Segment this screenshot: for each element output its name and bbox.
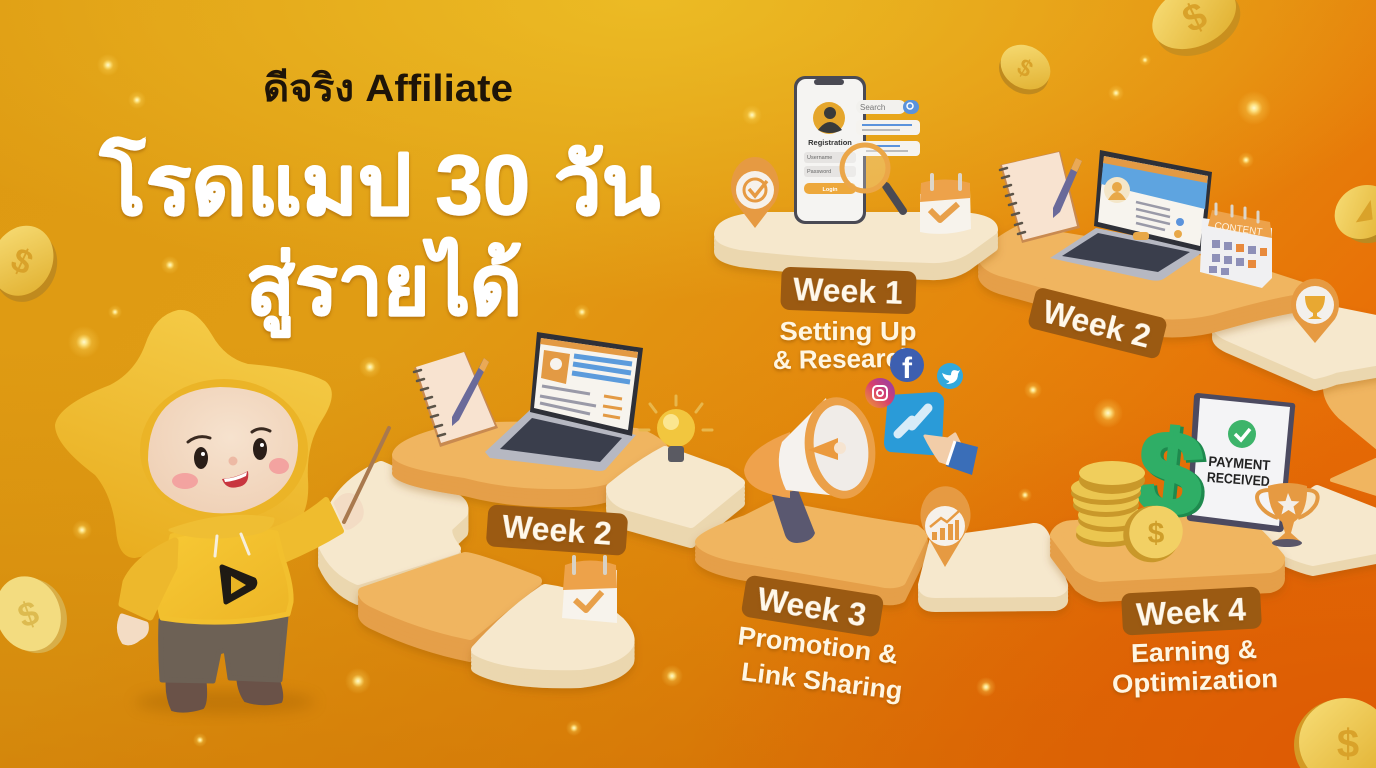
password field — [804, 166, 856, 177]
icon: search panel — [856, 100, 920, 156]
icon: facebook — [890, 348, 924, 385]
star hood — [55, 310, 332, 558]
platform: cream far right lower — [1252, 490, 1376, 571]
icon: green dollar: $ — [1133, 407, 1212, 545]
icon: tablet payment received: RECEIVED — [1206, 469, 1270, 489]
label: week 2 top — [1027, 286, 1168, 360]
face — [148, 387, 298, 513]
platform: orange left top — [397, 427, 663, 502]
platform: orange right edge high — [1325, 367, 1376, 450]
username field: Username — [807, 155, 832, 161]
sleeve left — [122, 541, 175, 617]
login button — [804, 183, 856, 194]
text: setting up and research — [773, 316, 916, 375]
coin: top middle — [990, 36, 1059, 103]
text: earning and optimization — [1112, 634, 1279, 699]
eyebrows — [188, 429, 270, 442]
coin: left lower: $ — [13, 594, 44, 636]
icon: instagram — [865, 378, 895, 408]
label: week 2 left — [486, 504, 628, 556]
hoodie — [158, 529, 291, 622]
text: setting up and research: & Research — [773, 343, 916, 375]
icon: coin stack — [1071, 461, 1192, 573]
platform: big cream bend — [323, 466, 463, 600]
icon: pointing hand — [925, 434, 978, 475]
label: week 1 — [780, 267, 917, 314]
icon: search panel: Search — [860, 103, 885, 112]
trousers — [161, 616, 286, 681]
coin: right edge — [1325, 172, 1376, 256]
label: week 4 — [1121, 586, 1262, 636]
label: week 1: Week 1 — [793, 271, 903, 311]
username field — [804, 152, 856, 163]
text: promotion and link sharing: Link Sharing — [740, 656, 904, 706]
platform: cream week 1 — [719, 217, 993, 275]
nose — [228, 456, 238, 466]
hand right — [335, 495, 362, 528]
label: week 3: Week 3 — [755, 581, 869, 633]
icon: pin chart — [920, 486, 970, 567]
platform: cream middle — [923, 528, 1063, 607]
platform: cream right upper — [1217, 303, 1376, 386]
icon: calendar top — [920, 175, 971, 234]
registration text: Registration — [808, 138, 852, 147]
coin: top middle: $ — [1012, 53, 1038, 84]
icon: left laptop — [485, 332, 643, 471]
coin: left lower — [0, 565, 77, 664]
icon: green dollar: $ — [1130, 405, 1209, 543]
shoes — [167, 672, 282, 712]
coin: bottom right: $ — [1337, 722, 1359, 766]
icon: content calendar: CONTENT — [1214, 221, 1263, 238]
icon: pin check — [731, 157, 779, 228]
title line 1: โรดแมป 30 วัน — [99, 137, 660, 232]
cone — [779, 398, 846, 497]
icon: pin trophy — [1291, 279, 1339, 343]
arm raised — [268, 500, 341, 560]
icon: facebook: f — [902, 352, 913, 385]
text: earning and optimization: Earning & — [1131, 634, 1258, 668]
label: week 4: Week 4 — [1135, 591, 1247, 633]
big coin — [1113, 495, 1191, 573]
icon: top notebook — [1000, 151, 1082, 243]
pen — [452, 358, 489, 426]
check badge — [1228, 420, 1256, 448]
icon: twitter — [937, 363, 963, 389]
icon: calendar small — [562, 557, 617, 623]
icon: tablet payment received — [1187, 393, 1295, 532]
text: setting up and research: Setting Up — [780, 316, 916, 346]
platform: cream connector — [611, 451, 740, 543]
password field: Password — [807, 169, 831, 175]
platform: orange week 4 — [1055, 517, 1280, 597]
heading: brand: ดีจริง Affiliate — [263, 68, 513, 110]
payment text: PAYMENT — [1208, 453, 1271, 473]
label: week 3 — [741, 574, 884, 638]
coin: left upper: $ — [5, 240, 39, 283]
avatar — [813, 102, 845, 134]
logo play — [222, 567, 255, 602]
eyes — [194, 447, 208, 469]
pointer — [344, 428, 389, 522]
icon: left notebook — [414, 352, 498, 447]
platform: orange week 3 — [700, 505, 923, 600]
icon: top laptop — [1050, 150, 1212, 281]
text: earning and optimization: Optimization — [1112, 663, 1279, 699]
handle — [772, 490, 815, 543]
coin: bottom right — [1294, 698, 1376, 768]
icon: magnifier — [842, 145, 903, 211]
icon: content calendar — [1200, 204, 1272, 288]
cheeks — [172, 473, 198, 489]
coin: top right — [1142, 0, 1251, 69]
road path platforms — [323, 217, 1376, 683]
icon: trophy star — [1257, 483, 1318, 547]
hood collar — [170, 516, 273, 537]
pen — [1053, 158, 1082, 218]
icon: link tile — [884, 392, 944, 455]
label: week 2 left: Week 2 — [501, 508, 613, 552]
text: promotion and link sharing: Promotion & — [736, 620, 900, 670]
mouth — [222, 471, 248, 488]
back — [744, 432, 790, 498]
drawstrings — [215, 534, 249, 556]
icon: coin stack: $ — [1148, 517, 1165, 550]
platform: orange week 2 top — [983, 230, 1305, 332]
character: star mascot — [55, 310, 389, 714]
title line 2: สู่รายได้ — [246, 237, 522, 338]
icon: megaphone — [744, 393, 882, 543]
label: week 2 top: Week 2 — [1039, 293, 1154, 355]
text: promotion and link sharing — [736, 620, 904, 706]
platform: orange lower — [363, 557, 537, 657]
hand left — [119, 616, 146, 643]
icon: top phone — [794, 76, 866, 224]
sparkles — [68, 54, 1271, 747]
login button: Login — [823, 187, 838, 193]
coin: left upper — [0, 215, 70, 312]
platform: cream bottom — [476, 589, 630, 683]
icon: light bulb — [640, 396, 712, 462]
bell — [798, 393, 882, 503]
platform: orange right edge low — [1332, 460, 1376, 495]
